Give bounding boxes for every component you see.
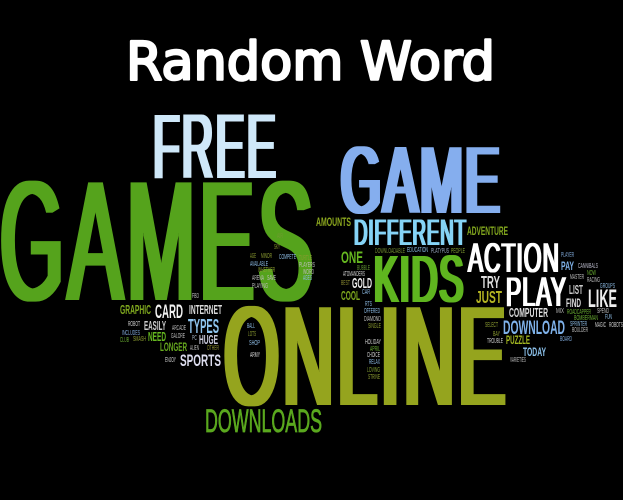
- small words: ROBOT: [128, 321, 140, 328]
- word: CARD: CARD: [155, 302, 183, 323]
- word: DOWNLOAD: DOWNLOAD: [503, 318, 565, 339]
- word cloud: [0, 96, 617, 439]
- small words: ALIEN: [190, 345, 199, 352]
- small words: OFFERED: [364, 308, 380, 315]
- word: SMASH: SMASH: [133, 336, 146, 343]
- word: PLAY: PLAY: [506, 268, 567, 315]
- word cloud: NEED: [148, 329, 166, 344]
- word: CAR: CAR: [362, 289, 370, 296]
- word: PLAYERS: PLAYERS: [299, 262, 315, 269]
- small words: BUBBLE: [357, 265, 370, 272]
- word: ARENA: ARENA: [252, 275, 264, 282]
- word cloud: EASILY: [144, 318, 166, 333]
- title: Random Word: [126, 32, 495, 92]
- word: AMOUNTS: AMOUNTS: [316, 215, 351, 229]
- word: SINGLE: SINGLE: [368, 323, 381, 330]
- small words: BOARD: [560, 336, 572, 343]
- word: JUST: JUST: [476, 287, 502, 307]
- small words: ENJOY: [165, 357, 176, 364]
- word: PEOPLE: PEOPLE: [451, 248, 465, 255]
- word: SAVE: SAVE: [267, 275, 276, 282]
- word: PLAYING: PLAYING: [252, 283, 268, 290]
- small words: SPEND: [597, 308, 609, 315]
- word: DOWNLOADABLE: DOWNLOADABLE: [375, 248, 405, 255]
- small words: RELAX: [369, 359, 380, 366]
- small words: STRINE: [368, 374, 380, 381]
- small words: AGE: [250, 253, 256, 260]
- word: PUZZLE: PUZZLE: [506, 333, 530, 347]
- word: PC: PC: [192, 335, 197, 342]
- small words: [120, 233, 623, 381]
- small words: APRIL: [370, 346, 380, 353]
- word: PLATYPUS: PLATYPUS: [431, 248, 449, 255]
- word cloud: FREE: [153, 96, 278, 198]
- word: FBD: FBD: [192, 293, 199, 300]
- word cloud: GOLD: [352, 276, 372, 292]
- small words: COMPETE: [279, 254, 296, 261]
- small words: LOTS: [248, 331, 256, 338]
- word: GRAPHIC: GRAPHIC: [120, 302, 151, 317]
- word: BOMBERMAN: BOMBERMAN: [574, 315, 598, 322]
- small words: OTHER: [207, 345, 219, 352]
- small words: LOVING: [367, 367, 380, 374]
- word: AIR: AIR: [277, 233, 283, 240]
- small words: VARIETIES: [510, 357, 526, 364]
- small words: GALORE: [171, 333, 185, 340]
- small words: ROADCAPPER: [567, 309, 591, 316]
- word: DOWNLOADS: DOWNLOADS: [205, 403, 322, 439]
- word: ONE: ONE: [341, 248, 363, 267]
- word: BAY: BAY: [493, 331, 500, 338]
- word: DIAMOND: DIAMOND: [364, 316, 381, 323]
- small words: AVAILABLE: [250, 261, 268, 268]
- word: LONGER: LONGER: [160, 340, 187, 354]
- small words: TURTLE: [299, 255, 312, 262]
- word: SPORTS: SPORTS: [180, 351, 221, 370]
- word: TODAY: TODAY: [523, 345, 546, 359]
- word: BEST: BEST: [341, 280, 350, 287]
- word: MIX: MIX: [556, 308, 564, 315]
- word: ARMY: ARMY: [250, 352, 260, 359]
- small words: FUN: [605, 314, 612, 321]
- small words: MAGIC: [595, 322, 606, 329]
- small words: BALL: [247, 323, 255, 330]
- word: HOLIDAY: HOLIDAY: [365, 339, 381, 346]
- word: NOW: NOW: [587, 270, 596, 277]
- small words: WHETHER: [258, 267, 275, 274]
- word: SHOP: SHOP: [249, 340, 260, 347]
- small words: CHOICE: [367, 352, 380, 359]
- small words: ATOMANDERS: [343, 271, 365, 278]
- small words: ARCADE: [172, 325, 186, 332]
- small words: PLAYER: [561, 252, 574, 259]
- small words: RACING: [587, 277, 600, 284]
- word: EDUCATION: EDUCATION: [407, 247, 428, 254]
- word cloud: LIST: [569, 282, 583, 297]
- word cloud: TYPES: [188, 316, 219, 338]
- word: COOL: COOL: [341, 288, 360, 303]
- word: PAY: PAY: [561, 259, 574, 273]
- word: COMPUTER: COMPUTER: [509, 305, 548, 320]
- small words: SKY: [274, 244, 280, 251]
- word: HUGE: HUGE: [199, 332, 218, 347]
- small words: SPRINTER: [570, 321, 587, 328]
- small words: BOULDER: [572, 327, 588, 334]
- small words: CLUB: [120, 337, 129, 344]
- small words: SELECT: [485, 322, 498, 329]
- word: RTS: RTS: [365, 301, 372, 308]
- small words: AGES: [303, 275, 312, 282]
- word: CANNIBALS: CANNIBALS: [578, 263, 598, 270]
- word: ADVENTURE: ADVENTURE: [467, 224, 508, 238]
- word: INTERNET: INTERNET: [189, 302, 222, 317]
- small words: WORD: [303, 269, 314, 276]
- small words: TROUBLE: [487, 338, 503, 345]
- word: INCLUDES: INCLUDES: [122, 330, 140, 337]
- word: KIDS: KIDS: [374, 242, 465, 317]
- small words: MINOR: [261, 253, 272, 260]
- small words: MASTER: [570, 274, 584, 281]
- word: DIFFERENT: DIFFERENT: [354, 212, 467, 253]
- word: FIND: FIND: [566, 296, 581, 310]
- word: TRY: TRY: [481, 272, 500, 292]
